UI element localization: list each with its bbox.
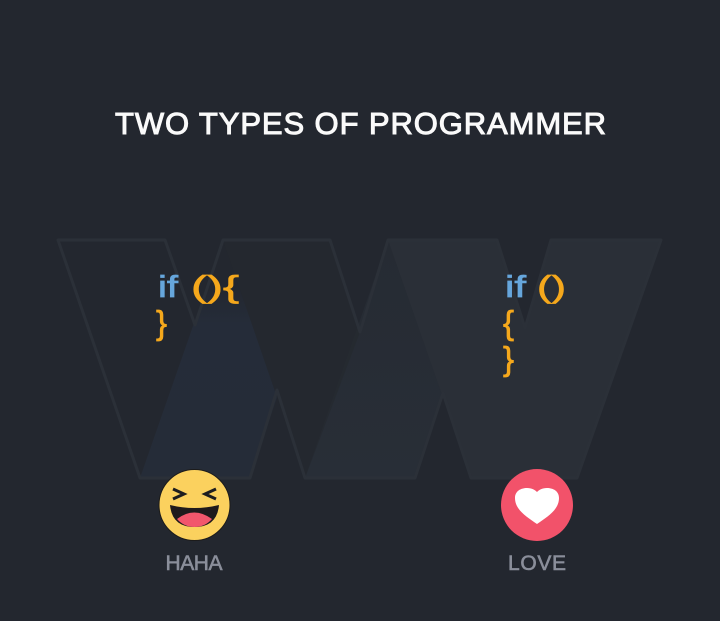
keyword if: if xyxy=(505,269,527,304)
label: love: LOVE xyxy=(508,552,566,575)
heart xyxy=(515,488,559,524)
watermark W shapes xyxy=(58,240,661,478)
right eye xyxy=(205,489,216,499)
filled band two xyxy=(305,240,443,478)
left code snippet xyxy=(156,269,239,341)
right code snippet xyxy=(503,269,566,377)
closing brace: } xyxy=(156,304,167,341)
tongue xyxy=(177,512,212,527)
opening brace: { xyxy=(503,304,514,341)
parentheses and opening brace: (){ xyxy=(191,269,239,304)
title: TWO TYPES OF PROGRAMMER xyxy=(115,106,606,141)
left eye xyxy=(173,489,184,499)
icon: haha emoji xyxy=(159,470,230,540)
closing brace: } xyxy=(503,340,514,377)
filled band three xyxy=(388,240,661,478)
open mouth xyxy=(170,505,219,527)
parentheses: () xyxy=(537,269,566,304)
outline of W xyxy=(58,240,661,478)
filled band one xyxy=(140,240,277,478)
label: haha: HAHA xyxy=(166,552,222,575)
icon: love reaction xyxy=(501,469,573,541)
keyword if: if xyxy=(158,269,178,304)
faint middle stroke xyxy=(223,240,360,478)
